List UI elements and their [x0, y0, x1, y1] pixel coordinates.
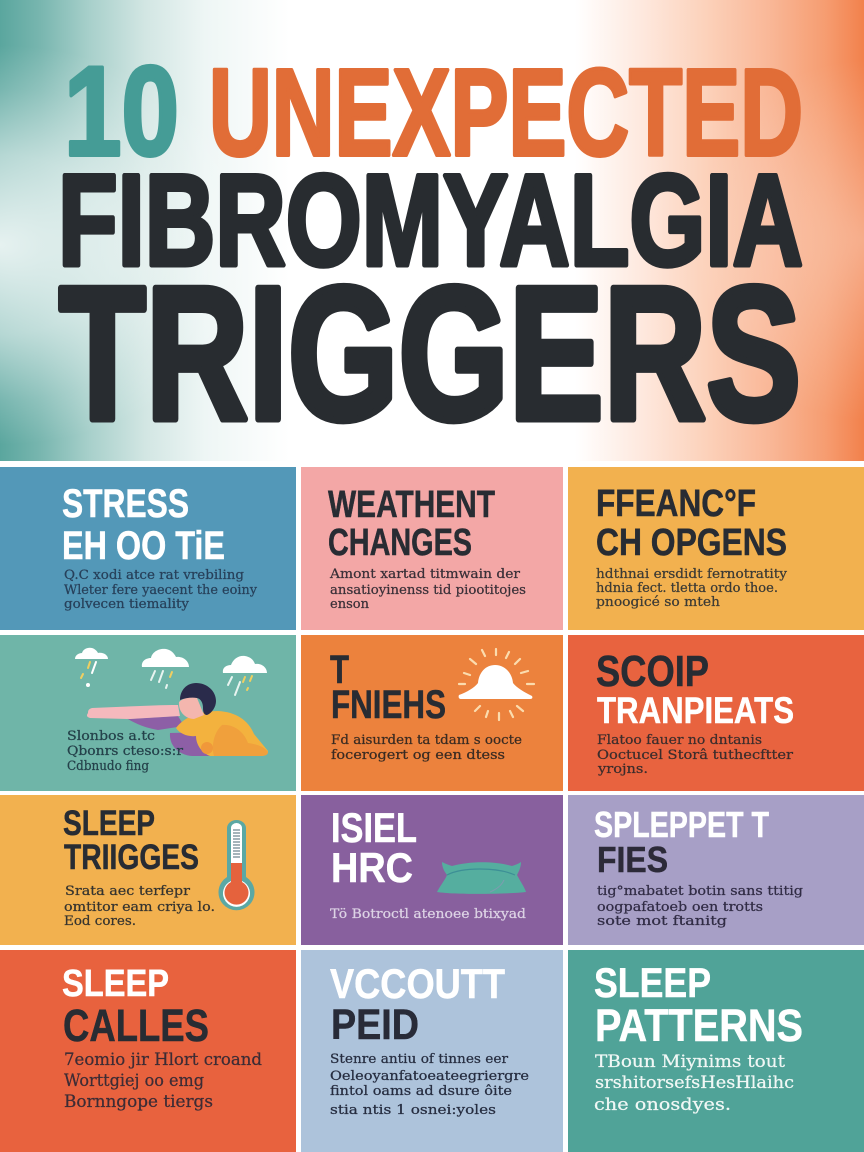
text block: splepper fies [597, 884, 803, 929]
text block: splepper fies: sote mot ftanitg [597, 914, 727, 929]
heading: fniehs: T [330, 648, 349, 692]
heading: scoip: TRANPIEATS [597, 690, 794, 731]
text block: ffeanc [596, 567, 788, 610]
text block: isiel hrc: Tö Botroctl atenoee btixyad [330, 907, 526, 922]
text block: sleep patterns: che onosdyes. [594, 1095, 731, 1115]
text block: stress: Wleter fere yaecent the eoiny [64, 583, 258, 598]
heading: stress: EH OO TiE [62, 524, 225, 568]
text block: ffeanc: hdthnai ersdidt fernotratity [596, 567, 788, 582]
panel: weather changes [301, 467, 563, 630]
panel: scoip [568, 635, 864, 791]
heading: sleep calles: SLEEP [62, 963, 169, 1005]
text block: sleep patterns [594, 1052, 794, 1115]
header gradient background [0, 0, 864, 461]
text block: stress: golvecen tiemality [64, 597, 190, 612]
heading: sleep patterns [594, 959, 803, 1051]
heading: ffeanc: CH OPGENS [596, 522, 787, 564]
text block: stress [64, 568, 258, 612]
text block: sleep calles: Worttgiej oo emg [64, 1071, 204, 1091]
heading: weather changes: CHANGES [328, 522, 472, 564]
text block: stress: Q.C xodi atce rat vrebiling [64, 568, 244, 583]
text block: scoip: Flatoo fauer no dntanis [597, 733, 762, 748]
heading: vccoutt peid: VCCOUTT [330, 960, 505, 1007]
text block: sleep calles [64, 1050, 262, 1112]
heading: sleep patterns: SLEEP [594, 959, 711, 1006]
heading: splepper fies: FIES [597, 839, 668, 880]
heading: sleep triggers: SLEEP [63, 804, 155, 843]
text block: rain illustration: Qbonrs cteso:s:r [67, 744, 184, 759]
text block: sleep triggers: omtitor eam criya lo. [64, 900, 215, 915]
text block: sleep triggers: Srata aec terfepr [65, 884, 191, 899]
heading: isiel hrc: ISIEL [331, 804, 417, 851]
heading: weather changes: WEATHENT [328, 484, 495, 526]
heading: scoip [596, 647, 794, 731]
heading: sleep calles: CALLES [63, 1000, 209, 1051]
text block: scoip [597, 733, 794, 777]
text block: vccoutt peid: Oeleoyanfatoeateegriergre [330, 1069, 529, 1084]
text block: splepper fies: oogpafatoeb oen trotts [597, 900, 763, 915]
heading: fniehs: FNIEHS [331, 683, 446, 727]
heading: sleep patterns: PATTERNS [595, 1000, 803, 1051]
icon: sun and cloud [459, 649, 534, 720]
panel: sleep patterns [568, 950, 864, 1152]
text block: sleep patterns: TBoun Miynims tout [595, 1052, 785, 1072]
icon: person lying down [87, 683, 268, 756]
heading: ffeanc: FFEANC°F [596, 483, 756, 525]
text block: fniehs: Fd aisurden ta tdam s oocte [331, 733, 522, 748]
heading: isiel hrc: HRC [331, 844, 413, 891]
heading: stress [62, 482, 225, 568]
panel: vccoutt peid [301, 950, 563, 1152]
text block: sleep calles: Bornngope tiergs [64, 1092, 213, 1112]
icon: pillow [437, 862, 526, 894]
text block: rain illustration: Cdbnudo fing [67, 759, 149, 774]
text block: weather changes: Amont xartad titmwain der [329, 567, 521, 582]
text block: rain illustration [67, 729, 184, 774]
text block: scoip: Ooctucel Storâ tuthecftter [597, 748, 794, 763]
text block: ffeanc: hdnia fect. tletta ordo thoe. [596, 581, 778, 596]
text block: sleep triggers [64, 884, 215, 929]
panel: sleep calles [0, 950, 296, 1152]
text block: sleep patterns: srshitorsefsHesHlaihc [595, 1073, 794, 1093]
panel: rain illustration [0, 635, 296, 791]
title [58, 40, 803, 460]
heading: scoip: SCOIP [596, 647, 709, 696]
icon: thermometer [219, 820, 254, 910]
heading: sleep calles [62, 963, 209, 1051]
text block: vccoutt peid [330, 1052, 529, 1118]
heading: ffeanc [596, 483, 787, 564]
text block: fniehs: focerogert og een dtess [331, 748, 505, 763]
heading: sleep triggers: TRIIGGES [64, 838, 199, 877]
heading: isiel hrc [331, 804, 417, 891]
heading: sleep triggers [63, 804, 199, 877]
text block: sleep calles: 7eomio jir Hlort croand [64, 1050, 262, 1070]
text block: splepper fies: tig°mabatet botin sans ttitig [597, 884, 803, 899]
text block: fniehs [331, 733, 522, 763]
heading: splepper fies: SPLEPPET T [594, 804, 769, 845]
heading: fniehs [330, 648, 446, 727]
panel: sleep triggers [0, 795, 296, 945]
panel: fniehs [301, 635, 563, 791]
heading: vccoutt peid [330, 960, 505, 1049]
text block: weather changes [329, 567, 526, 612]
panel: ffeanc [568, 467, 864, 630]
icon: clouds with rain [75, 648, 267, 695]
text block: rain illustration: Slonbos a.tc [67, 729, 155, 744]
text block: weather changes: enson [330, 597, 370, 612]
text block: sleep triggers: Eod cores. [64, 914, 136, 929]
text block: vccoutt peid: stia ntis 1 osnei:yoles [330, 1103, 496, 1118]
panel: isiel hrc [301, 795, 563, 945]
panel: splepper fies [568, 795, 864, 945]
text block: vccoutt peid: Stenre antiu of tinnes eer [330, 1052, 509, 1067]
heading: splepper fies [594, 804, 769, 880]
title: 10 [64, 40, 179, 182]
text block: vccoutt peid: fintol oams ad dsure ôite [330, 1084, 512, 1099]
text block: weather changes: ansatioyinenss tid piootitojes [330, 583, 526, 598]
text block: scoip: yrojns. [597, 762, 648, 777]
heading: weather changes [328, 484, 495, 564]
text block: ffeanc: pnoogicé so mteh [596, 595, 721, 610]
heading: vccoutt peid: PEID [331, 1001, 419, 1049]
heading: stress: STRESS [62, 482, 189, 526]
panel: stress [0, 467, 296, 630]
